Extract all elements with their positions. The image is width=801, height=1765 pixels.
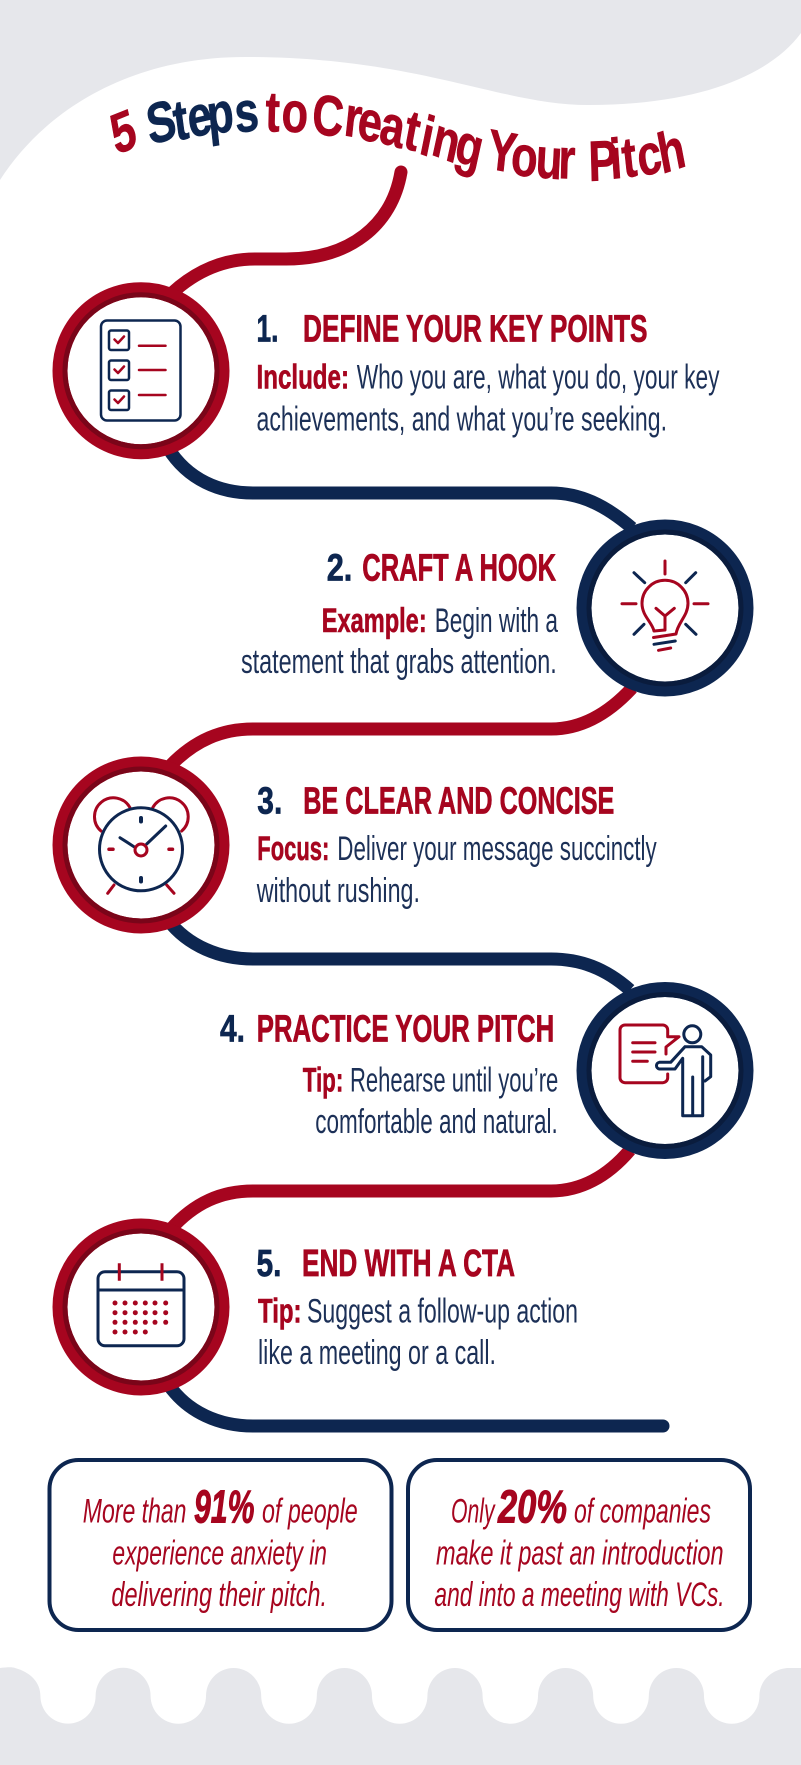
step 3 text: Focus: — [257, 830, 329, 868]
step 5 text: Tip: — [258, 1292, 302, 1330]
icon: lightbulb — [622, 561, 708, 650]
connector: title to step 1 — [172, 172, 401, 293]
step 2 text: statement that grabs attention. — [241, 643, 557, 681]
step 3 text: 3. — [257, 780, 282, 822]
callout: 91% statistic — [50, 1460, 392, 1630]
icon: checklist — [101, 320, 180, 420]
step 3 text: BE CLEAR AND CONCISE — [303, 780, 614, 822]
step 5 text: 5. — [256, 1243, 282, 1285]
icon: presenter at board — [620, 1025, 711, 1116]
step 2 circle with lightbulb icon — [584, 527, 746, 689]
step 4 text: comfortable and natural. — [315, 1103, 558, 1141]
callout: 20% statistic: Only — [451, 1493, 496, 1531]
icon: alarm clock — [95, 798, 188, 893]
step 2 text: Example: — [322, 602, 427, 640]
bottom scalloped band — [0, 1667, 801, 1765]
title: 5 Steps to Creating Your Pitch — [104, 78, 690, 193]
step 5 text — [256, 1243, 578, 1372]
step 1 circle with checklist icon — [60, 290, 222, 452]
step 1 text: Include: — [256, 358, 349, 396]
top wave background — [0, 0, 801, 180]
callout: 20% statistic — [408, 1460, 750, 1630]
step 4 text: PRACTICE YOUR PITCH — [257, 1009, 554, 1051]
connector: step 1 to step 2 — [168, 448, 632, 528]
callout: 91% statistic: 91% — [194, 1481, 254, 1533]
connector: step 5 tail — [168, 1384, 663, 1426]
callout: 91% statistic: delivering their pitch. — [111, 1576, 327, 1614]
step 5 text: END WITH A CTA — [302, 1243, 515, 1285]
step 5 text: like a meeting or a call. — [258, 1334, 496, 1372]
callout: 20% statistic: of companies — [574, 1493, 711, 1531]
step 2 text: 2. — [327, 548, 352, 590]
step 4 text: Rehearse until you’re — [350, 1062, 558, 1100]
step 4 text: Tip: — [303, 1062, 343, 1100]
step 4 circle with presenter icon — [584, 990, 746, 1152]
step 1 text — [256, 308, 720, 438]
step 2 text: CRAFT A HOOK — [362, 548, 556, 590]
step 3 text — [256, 780, 657, 910]
connector: step 4 to step 5 — [170, 1150, 630, 1230]
step 5 text: Suggest a follow-up action — [307, 1292, 578, 1330]
connector: step 3 to step 4 — [168, 920, 630, 990]
connector: step 2 to step 3 — [170, 688, 632, 766]
callout: 91% statistic: More than — [83, 1493, 186, 1531]
step 1 text: 1. — [256, 308, 278, 350]
step 4 text: 4. — [220, 1009, 245, 1051]
callout: 91% statistic: of people — [262, 1493, 358, 1531]
icon: calendar — [98, 1263, 184, 1346]
step 4 text — [220, 1009, 558, 1141]
step 5 circle with calendar icon — [60, 1226, 222, 1388]
step 3 circle with alarm clock icon — [60, 764, 222, 926]
callout: 20% statistic: 20% — [497, 1481, 567, 1533]
callout: 91% statistic: experience anxiety in — [112, 1534, 327, 1572]
step 3 text: without rushing. — [256, 872, 420, 910]
step 2 text: Begin with a — [435, 602, 558, 640]
step 2 text — [241, 548, 558, 681]
step 1 text: DEFINE YOUR KEY POINTS — [303, 308, 648, 350]
